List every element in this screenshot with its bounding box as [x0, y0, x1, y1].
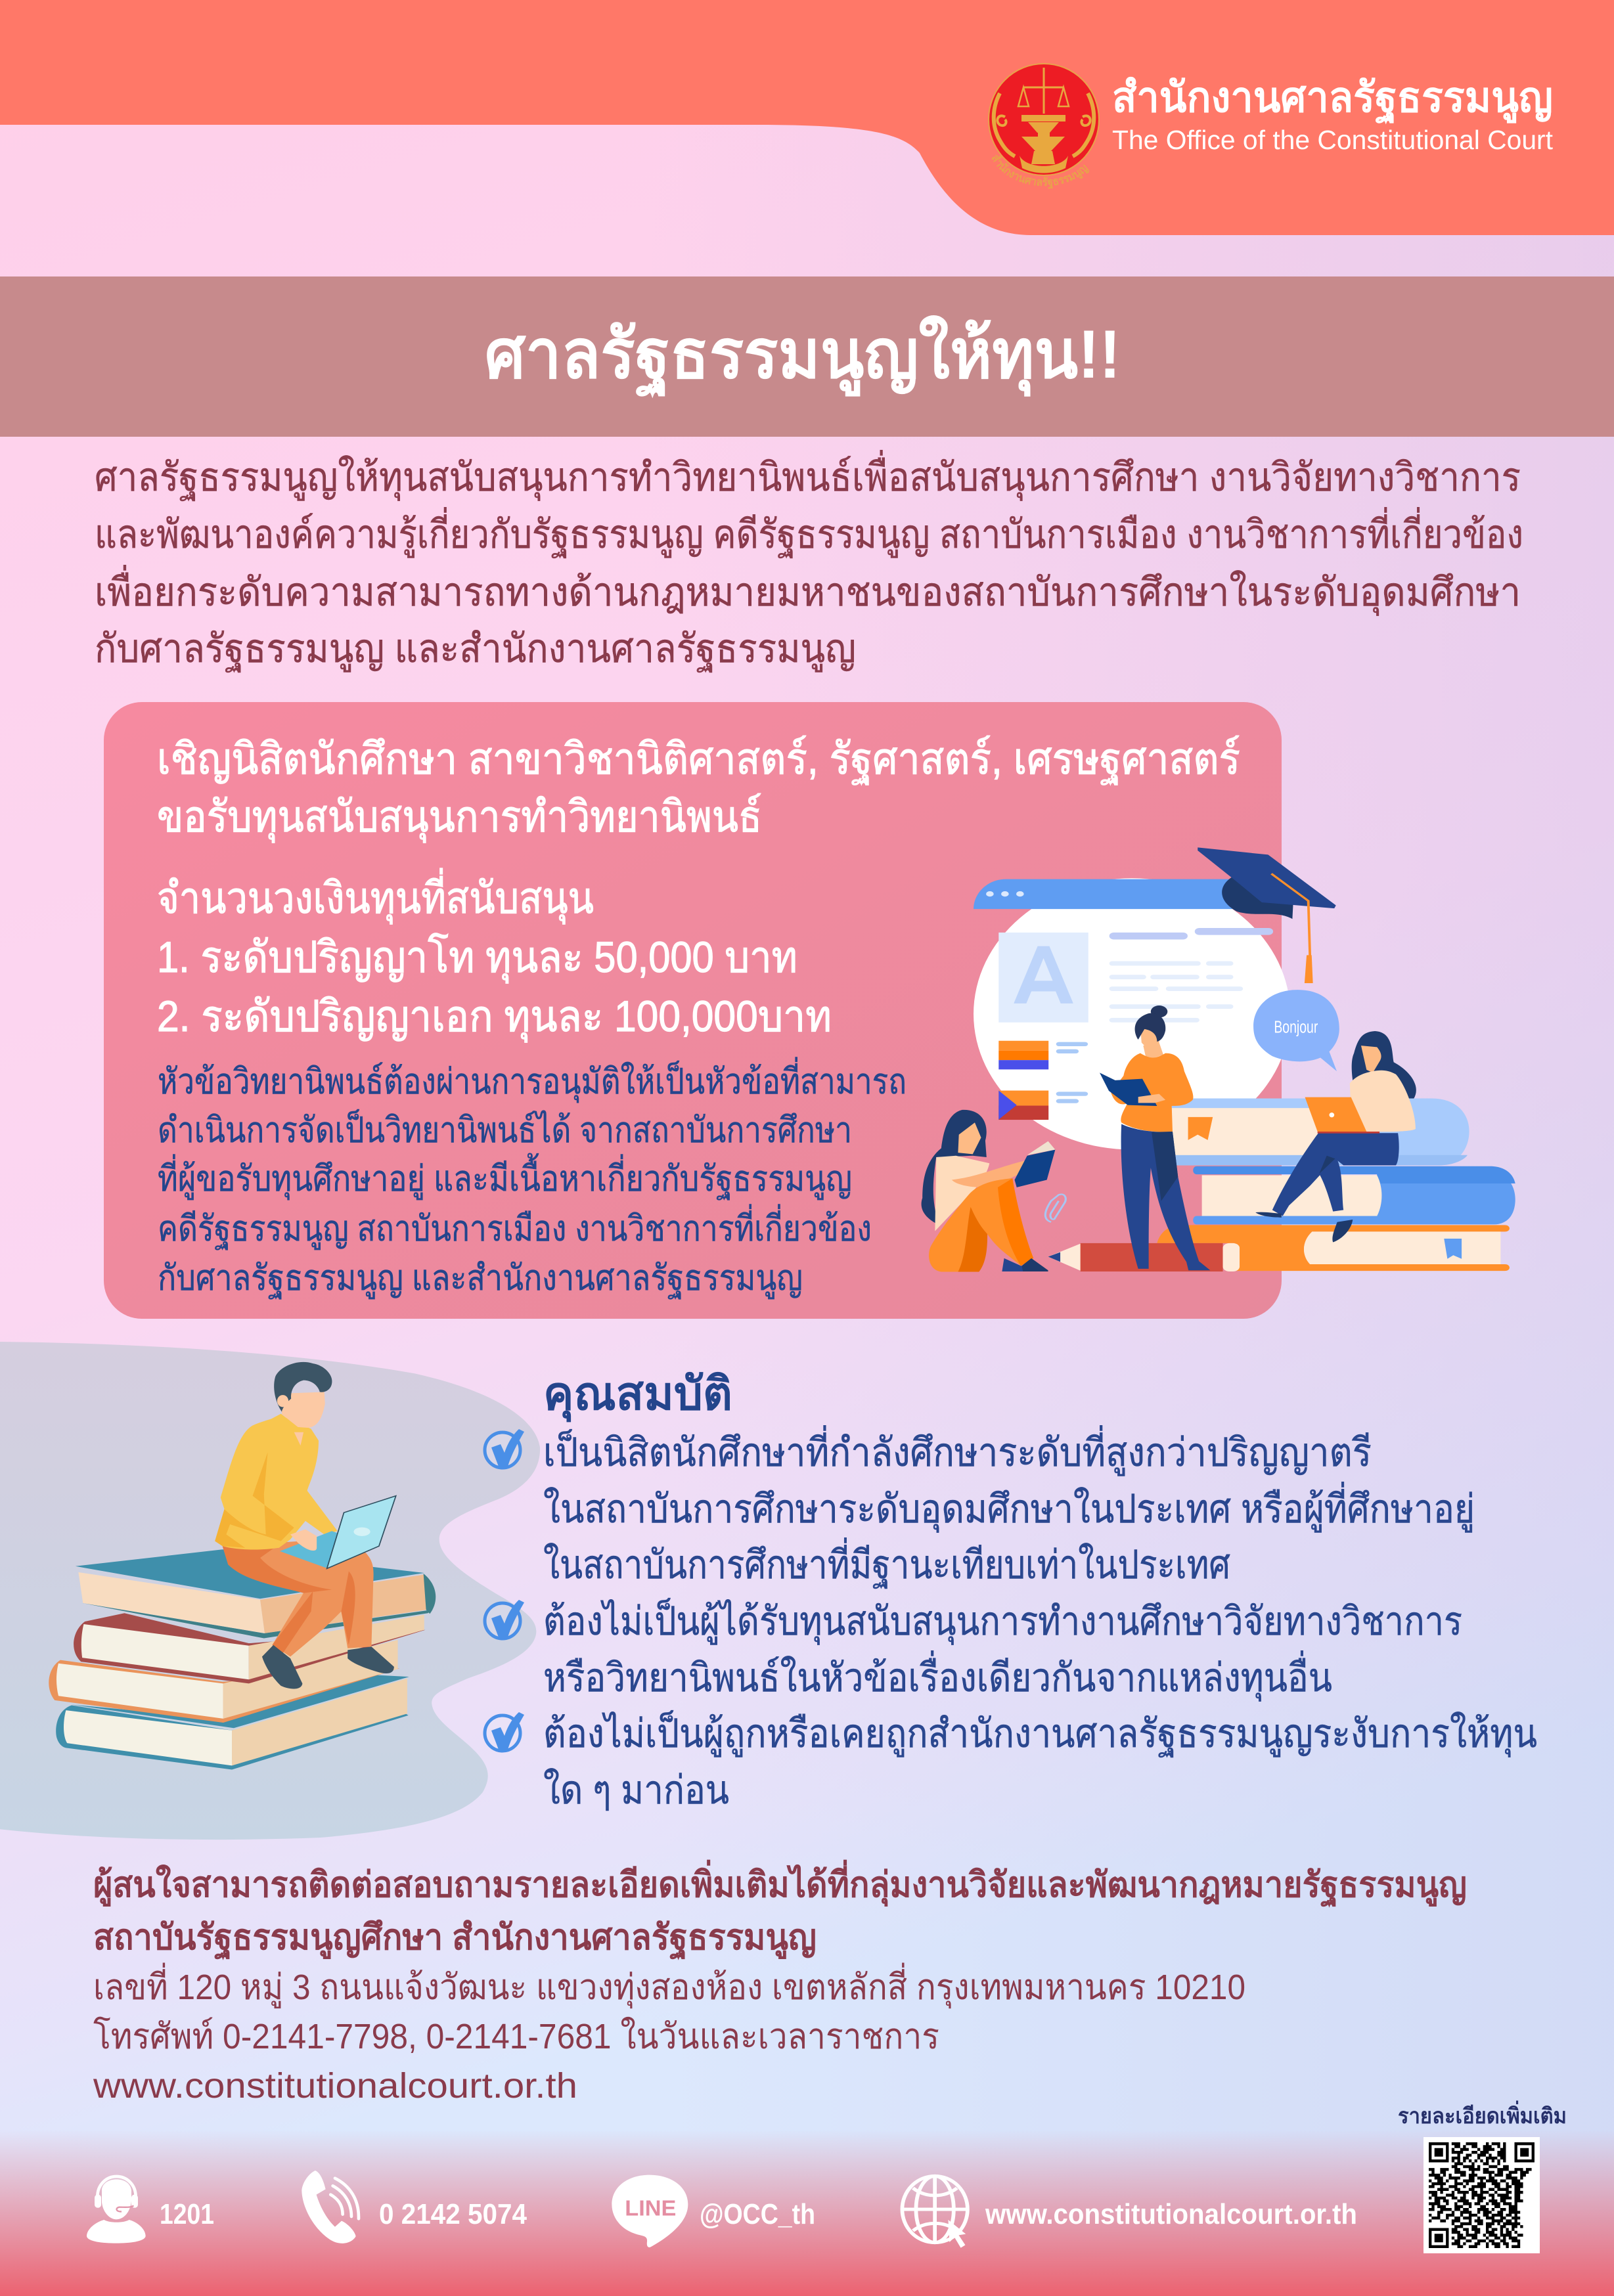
- thesis topic conditions: คดีรัฐธรรมนูญ สถาบันการเมือง งานวิชาการที่เกี่ยวข้อง: [158, 1204, 872, 1250]
- icon: globe with cursor: [902, 2176, 968, 2248]
- qualification 2: ต้องไม่เป็นผู้ได้รับทุนสนับสนุนการทำงานศึกษาวิจัยทางวิชาการ: [543, 1598, 1462, 1645]
- red book: [74, 1613, 425, 1683]
- qualification 2: [543, 1598, 1462, 1702]
- qualifications background blob: [0, 1342, 540, 1840]
- qualification 1: [543, 1425, 1475, 1589]
- man's legs: [223, 1541, 394, 1689]
- invitation heading: เชิญนิสิตนักศึกษา สาขาวิชานิติศาสตร์, รัฐศาสตร์, เศรษฐศาสตร์: [157, 734, 1240, 785]
- panel: invitation and funding: [104, 702, 1282, 1319]
- intro paragraph: เพื่อยกระดับความสามารถทางด้านกฎหมายมหาชนของสถาบันการศึกษาในระดับอุดมศึกษา: [95, 565, 1521, 616]
- illustration: students with books and web page: [922, 847, 1515, 1272]
- invitation heading: ขอรับทุนสนับสนุนการทำวิทยานิพนธ์: [157, 792, 762, 843]
- thesis topic conditions: [158, 1057, 907, 1299]
- funding amounts: 1. ระดับปริญญาโท ทุนละ 50,000 บาท: [157, 933, 797, 984]
- icon: check 2: [485, 1600, 524, 1639]
- funding amounts: 2. ระดับปริญญาเอก ทุนละ 100,000บาท: [157, 992, 832, 1043]
- qualification 2: หรือวิทยานิพนธ์ในหัวข้อเรื่องเดียวกันจากแหล่งทุนอื่น: [543, 1650, 1332, 1702]
- web page window: [974, 878, 1290, 1150]
- logo text: Thai name: สำนักงานศาลรัฐธรรมนูญ: [1112, 74, 1553, 124]
- logo: Constitutional Court seal: [988, 63, 1100, 189]
- funding amounts: จำนวนวงเงินทุนที่สนับสนุน: [157, 868, 594, 925]
- speech bubble: [1253, 990, 1339, 1071]
- contact heading: สถาบันรัฐธรรมนูญศึกษา สำนักงานศาลรัฐธรรมนูญ: [93, 1918, 817, 1960]
- contact heading: ผู้สนใจสามารถติดต่อสอบถามรายละเอียดเพิ่มเติมได้ที่กลุ่มงานวิจัยและพัฒนากฎหมายรัฐธรรมนูญ: [93, 1859, 1467, 1908]
- man's laptop and hands: [280, 1496, 396, 1568]
- fax number: 0 2142 5074: [379, 2198, 527, 2230]
- LINE account: @OCC_th: [700, 2198, 815, 2230]
- heading: qualifications: คุณสมบัติ: [543, 1368, 732, 1423]
- man's shirt shadow: [215, 1452, 294, 1548]
- intro paragraph: [95, 450, 1523, 673]
- icon: telephone: [302, 2171, 359, 2243]
- speech bubble: Bonjour: [1274, 1019, 1318, 1037]
- icon: LINE bubble: LINE: [625, 2196, 676, 2220]
- thesis topic conditions: ดำเนินการจัดเป็นวิทยานิพนธ์ได้ จากสถาบันการศึกษา: [158, 1109, 852, 1150]
- stacked books: [1157, 1098, 1515, 1271]
- logo: Constitutional Court seal: สำนักงานศาลรัฐธรรมนูญ: [992, 155, 1089, 189]
- website address: www.constitutionalcourt.or.th: [985, 2198, 1357, 2230]
- student on books with laptop: [1255, 1031, 1416, 1243]
- paperclip: [1045, 1195, 1065, 1222]
- funding amounts: [157, 868, 832, 1043]
- intro paragraph: กับศาลรัฐธรรมนูญ และสำนักงานศาลรัฐธรรมนูญ: [95, 627, 856, 673]
- title banner: ศาลรัฐธรรมนูญให้ทุน!!: [485, 315, 1121, 399]
- qualification list: [485, 1425, 1537, 1812]
- qualification 3: [543, 1710, 1537, 1812]
- invitation heading: [157, 734, 1240, 843]
- telephone: โทรศัพท์ 0-2141-7798, 0-2141-7681 ในวันและเวลาราชการ: [93, 2016, 939, 2056]
- qualification 1: ในสถาบันการศึกษาที่มีฐานะเทียบเท่าในประเทศ: [543, 1537, 1230, 1589]
- orange book: [49, 1640, 399, 1723]
- qualification 1: ในสถาบันการศึกษาระดับอุดมศึกษาในประเทศ หรือผู้ที่ศึกษาอยู่: [543, 1482, 1475, 1533]
- QR caption: รายละเอียดเพิ่มเติม: [1398, 2100, 1567, 2128]
- pencil: [1048, 1243, 1240, 1271]
- website: www.constitutionalcourt.or.th: [93, 2066, 577, 2106]
- icon: check 3: [485, 1712, 524, 1751]
- header coral band: [0, 0, 1614, 235]
- title banner: [0, 276, 1614, 437]
- thesis topic conditions: หัวข้อวิทยานิพนธ์ต้องผ่านการอนุมัติให้เป็นหัวข้อที่สามารถ: [158, 1057, 907, 1103]
- icon: LINE bubble: [612, 2175, 688, 2247]
- qualification 3: ใด ๆ มาก่อน: [543, 1768, 729, 1812]
- helpline number: 1201: [160, 2198, 214, 2230]
- thesis topic conditions: กับศาลรัฐธรรมนูญ และสำนักงานศาลรัฐธรรมนูญ: [158, 1258, 803, 1299]
- illustration: man with laptop sitting on books: [49, 1362, 436, 1769]
- address: เลขที่ 120 หมู่ 3 ถนนแจ้งวัฒนะ แขวงทุ่งสองห้อง เขตหลักสี่ กรุงเทพมหานคร 10210: [93, 1962, 1245, 2009]
- student standing: [1100, 1005, 1210, 1270]
- icon: call centre headset: [87, 2176, 146, 2243]
- QR code: [1423, 2137, 1540, 2253]
- qualification 1: เป็นนิสิตนักศึกษาที่กำลังศึกษาระดับที่สูงกว่าปริญญาตรี: [543, 1425, 1372, 1476]
- intro paragraph: ศาลรัฐธรรมนูญให้ทุนสนับสนุนการทำวิทยานิพนธ์เพื่อสนับสนุนการศึกษา งานวิจัยทางวิชาการ: [95, 450, 1521, 501]
- icon: check 1: [485, 1429, 524, 1468]
- bottom book: [56, 1675, 409, 1769]
- contact heading: [93, 1859, 1467, 1960]
- graduation cap: [1198, 847, 1336, 983]
- man's shirt: [215, 1415, 338, 1550]
- student sitting on floor: [922, 1110, 1055, 1272]
- top book: [76, 1549, 436, 1638]
- thesis topic conditions: ที่ผู้ขอรับทุนศึกษาอยู่ และมีเนื้อหาเกี่ยวกับรัฐธรรมนูญ: [158, 1153, 852, 1201]
- man's head and hair: [271, 1362, 332, 1446]
- logo text: English name: The Office of the Constitutional Court: [1112, 125, 1554, 155]
- contact information: [93, 1859, 1467, 2106]
